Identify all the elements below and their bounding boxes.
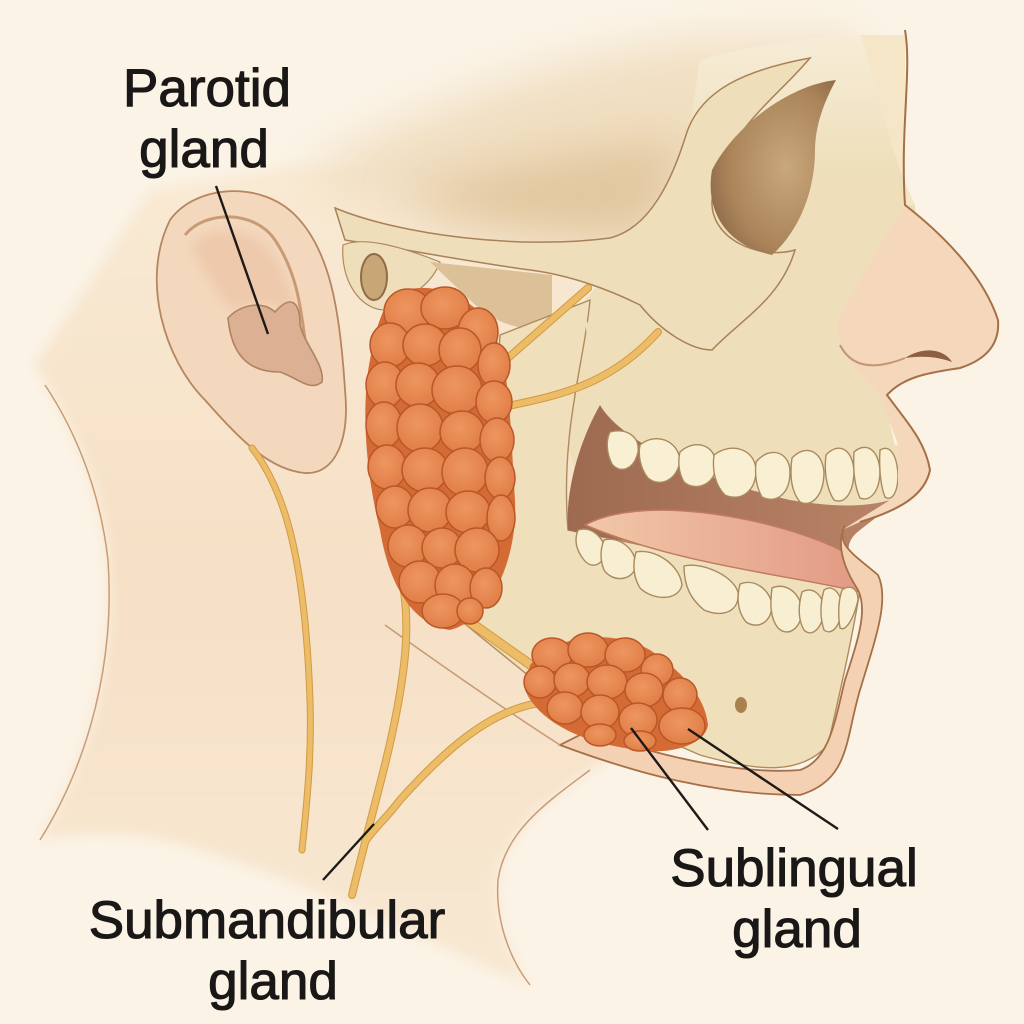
label: sublingual gland: gland	[732, 900, 862, 959]
label: submandibular gland: gland	[208, 952, 338, 1011]
label: submandibular gland: Submandibular	[89, 891, 445, 950]
nostril	[905, 350, 952, 362]
zygomatic root bone	[343, 242, 440, 310]
label: parotid gland: Parotid	[123, 59, 291, 118]
zygomatic arch	[335, 58, 810, 350]
leader line: parotid	[216, 186, 268, 334]
leader line: submandibular	[323, 824, 374, 880]
leader line: sublingual two	[688, 729, 838, 829]
nose and upper lip skin	[838, 30, 998, 530]
upper teeth	[607, 431, 898, 503]
mandible	[460, 300, 900, 768]
mental foramen	[735, 697, 747, 713]
jaw skin line	[385, 625, 560, 745]
nose wing line	[840, 345, 905, 365]
label: sublingual gland: Sublingual	[670, 839, 918, 898]
temporal recess	[430, 262, 552, 328]
orbit	[711, 80, 836, 255]
mouth cavity	[568, 405, 905, 580]
neck and head skin	[35, 165, 640, 985]
tongue	[585, 510, 862, 592]
lower teeth	[576, 529, 858, 633]
ear	[157, 191, 346, 473]
nerves	[252, 288, 658, 895]
ear canal	[361, 254, 387, 300]
leader line: sublingual one	[631, 728, 708, 830]
skull	[335, 35, 920, 525]
lower lip and chin skin	[560, 525, 882, 795]
parotid gland	[365, 287, 515, 630]
cranium shading	[300, 40, 860, 245]
label: parotid gland: gland	[139, 120, 269, 179]
submandibular gland	[524, 633, 708, 751]
